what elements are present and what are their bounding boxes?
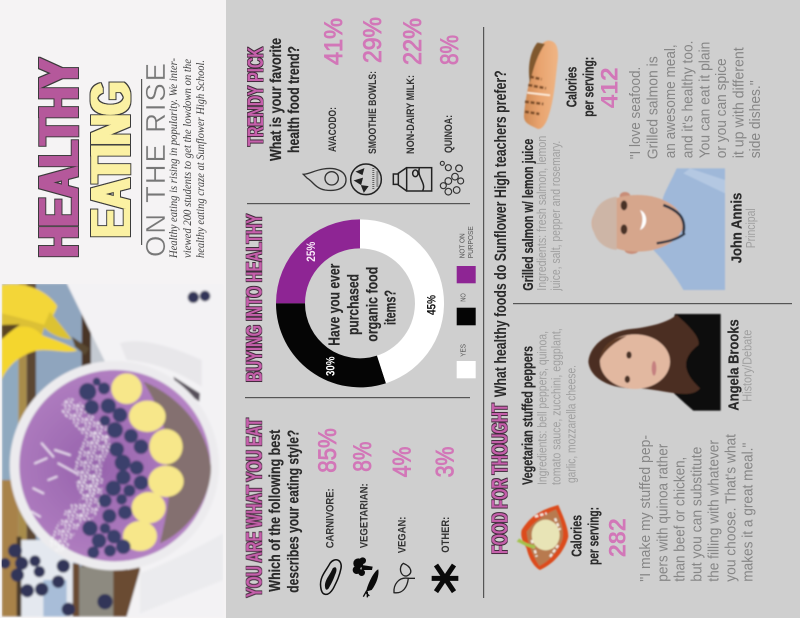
donut center question: organic food <box>364 267 381 342</box>
dish: stuffed peppers <box>519 328 579 485</box>
value: 25 percent: 25% <box>304 241 318 262</box>
dish: grilled salmon <box>520 136 563 292</box>
quote: john annis <box>628 41 764 159</box>
dish: grilled salmon: Ingredients: fresh salmon, lemon <box>535 136 549 291</box>
calories: pepper: Calories <box>569 515 586 557</box>
icon: quinoa <box>440 161 464 195</box>
stat: avocado: 41% <box>320 18 348 65</box>
stat: carnivore: CARNIVORE: <box>324 488 336 548</box>
quote: john annis: it up with different <box>731 47 747 158</box>
stat: vegetarian <box>349 442 377 548</box>
panel: buying into healthy <box>242 214 476 387</box>
question <box>267 429 302 593</box>
image: salmon <box>524 41 558 129</box>
legend: NOT ON <box>459 233 466 258</box>
photo: john annis <box>592 168 725 290</box>
image: stuffed pepper <box>517 505 568 570</box>
stat: smoothie bowls <box>359 17 387 154</box>
calories: pepper: per serving: <box>585 507 602 565</box>
section dividers <box>245 27 792 598</box>
question: describes your eating style? <box>285 430 302 593</box>
quote: angela brooks: than beef or chicken, <box>672 457 688 582</box>
stat: vegan: 4% <box>389 447 417 477</box>
question: Which of the following best <box>267 429 284 592</box>
stat: smoothie bowls: SMOOTHIE BOWLS: <box>367 71 379 154</box>
dish: stuffed peppers: garlic, mozzarella cheese. <box>565 365 579 483</box>
icon: asterisk <box>432 565 458 592</box>
quote: angela brooks <box>638 434 757 582</box>
icon: smoothie bowl <box>351 164 381 195</box>
donut center question: purchased <box>345 274 362 335</box>
value: 45 percent: 45% <box>425 295 439 315</box>
title: healthy: HEALTHY <box>27 59 91 257</box>
stat: vegan: VEGAN: <box>397 517 409 553</box>
stat: smoothie bowls: 29% <box>359 17 387 63</box>
dish: stuffed peppers: tomato sauce, zucchini, eggplant, <box>550 328 564 485</box>
quote: john annis: "I love seafood. <box>628 67 644 159</box>
stat: non-dairy milk: 22% <box>399 18 427 65</box>
bowl <box>10 361 219 570</box>
quote: angela brooks: pers with quinoa rather <box>655 444 671 582</box>
blueberries in bowl <box>79 378 148 558</box>
intro text: viewed 200 students to get the lowdown on the <box>182 59 194 258</box>
subtitle: on the rise: ON THE RISE <box>140 63 171 257</box>
donut center question: Have you ever <box>326 264 343 346</box>
heading: buying into healthy: BUYING INTO HEALTHY <box>242 214 267 382</box>
quote: angela brooks: but you can substitute <box>690 447 706 582</box>
calories: salmon: per serving: <box>580 57 597 117</box>
legend: NO <box>461 293 468 302</box>
calories: salmon <box>564 57 624 117</box>
stat: quinoa: QUINOA: <box>443 115 455 153</box>
panel: trendy pick <box>243 17 464 195</box>
panel: you are what you eat <box>242 418 459 597</box>
quote: john annis: an awesome meal, <box>663 44 679 158</box>
stat: non-dairy milk <box>399 18 427 154</box>
name: john annis: John Annis <box>729 193 746 263</box>
name: john annis: Principal <box>744 208 758 248</box>
coconut <box>32 408 100 542</box>
name: john annis <box>729 193 758 263</box>
icon: steak <box>321 560 341 594</box>
dish: stuffed peppers: Vegetarian stuffed peppers <box>519 346 536 485</box>
legend: YES <box>461 344 468 357</box>
intro text: Healthy eating is rising in popularity. We inter- <box>168 58 180 259</box>
quote: angela brooks: the filling with whatever <box>706 440 722 582</box>
stat: other: OTHER: <box>440 517 452 553</box>
stat: avocado <box>320 18 348 152</box>
intro text: healthy eating craze at Sunflower High School. <box>195 60 207 258</box>
heading: food for thought: FOOD FOR THOUGHT <box>487 403 512 554</box>
stat: other: 3% <box>431 447 459 477</box>
quote: john annis: or you can spice <box>714 58 730 158</box>
name: angela brooks: History/Debate <box>741 330 755 402</box>
calories: pepper: 282 <box>605 518 632 557</box>
calories: pepper <box>569 507 632 565</box>
dish: stuffed peppers: Ingredients: bell peppers, quinoa, <box>536 331 550 485</box>
dish: grilled salmon: Grilled salmon w/ lemon juice <box>520 139 537 291</box>
photo: angela brooks <box>588 314 721 411</box>
title: eating: EATING <box>79 82 143 237</box>
quote: john annis: side dishes." <box>748 80 764 158</box>
donut chart <box>276 219 444 387</box>
question: What is your favorite <box>268 38 285 161</box>
name: angela brooks: Angela Brooks <box>725 319 742 411</box>
stat: vegan <box>389 447 417 553</box>
question <box>268 38 303 161</box>
stat: other <box>431 447 459 553</box>
question: health food trend? <box>286 46 303 153</box>
stat: carnivore <box>314 428 342 548</box>
quote: john annis: and it's healthy too. <box>680 41 696 158</box>
banana slices <box>111 373 184 551</box>
panel: title column <box>0 0 226 618</box>
intro text <box>168 58 207 259</box>
quote: john annis: Grilled salmon is <box>646 56 662 159</box>
value: 30 percent: 30% <box>323 356 337 376</box>
stat: vegetarian: VEGETARIAN: <box>359 483 371 548</box>
icon: leaf <box>394 563 415 593</box>
loose blueberries <box>0 291 210 616</box>
quote: angela brooks: you choose. That's what <box>724 434 740 582</box>
stat: vegetarian: 8% <box>349 442 377 472</box>
quote: angela brooks: "I make my stuffed pep- <box>638 435 654 582</box>
stat: avocado: AVACODO: <box>327 107 339 152</box>
stat: quinoa: 8% <box>436 35 464 65</box>
icon: milk carton <box>393 168 432 191</box>
donut center question: items? <box>383 290 400 325</box>
donut center question <box>326 264 400 346</box>
quote: john annis: You can eat it plain <box>697 42 713 158</box>
calories: salmon: 412 <box>597 67 624 108</box>
stat: quinoa <box>436 35 464 153</box>
panel: food for thought <box>487 41 764 582</box>
bananas <box>2 313 45 337</box>
icon: avocado <box>303 168 346 190</box>
heading: trendy pick: TRENDY PICK <box>243 47 268 146</box>
heading: you are what you eat: YOU ARE WHAT YOU EAT <box>242 418 267 597</box>
stat: carnivore: 85% <box>314 428 342 473</box>
quote: angela brooks: makes it a great meal." <box>741 443 757 582</box>
dish: grilled salmon: juice, salt, pepper and rosemary. <box>549 141 563 292</box>
stat: non-dairy milk: NON-DAIRY MILK: <box>405 75 417 154</box>
legend <box>457 226 476 378</box>
legend: PURPOSE <box>468 226 475 258</box>
photo: smoothie bowl <box>0 283 223 617</box>
calories: salmon: Calories <box>564 67 581 107</box>
name: angela brooks <box>725 319 755 411</box>
icon: broccoli and carrot <box>353 557 379 597</box>
